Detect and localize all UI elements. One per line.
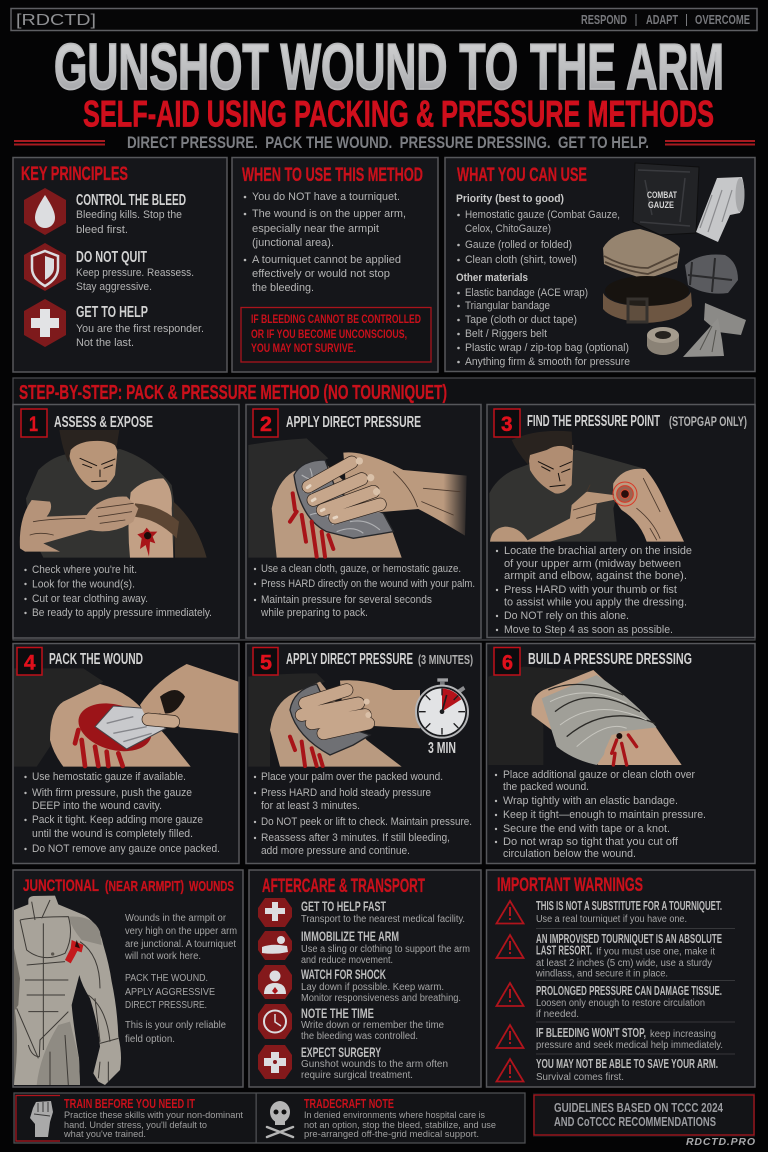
aftercare: watch for shock [301, 966, 461, 1004]
principle: control the bleed [76, 192, 186, 236]
principle: do not quit: Keep pressure. Reassess. [76, 267, 194, 279]
heading: junctional: (NEAR ARMPIT) [105, 879, 184, 895]
principle: do not quit: Stay aggressive. [76, 281, 152, 293]
tagline: DIRECT PRESSURE. PACK THE WOUND. PRESSURE DRESSING. GET TO HELP. [127, 133, 649, 152]
panel: when to use this method [232, 158, 438, 372]
callout: survival warning: IF BLEEDING CANNOT BE CONTROLLED [251, 312, 421, 326]
conditions list: The wound is on the upper arm, [252, 208, 406, 220]
panel: step-by-step section [13, 378, 755, 640]
icon: combat gauze packet: GAUZE [648, 200, 674, 211]
junctional text: DIRECT PRESSURE. [125, 1000, 207, 1011]
aftercare: expect surgery: Gunshot wounds to the arm often [301, 1059, 448, 1070]
icon: folded cloth [603, 229, 680, 279]
other materials list: Tape (cloth or duct tape) [465, 314, 577, 326]
illustration: sustained pressure [248, 673, 477, 767]
step 2 instructions: Use a clean cloth, gauze, or hemostatic gauze. [261, 563, 461, 575]
step 2 instructions: while preparing to pack. [260, 607, 368, 619]
illustration: pack the wound [14, 664, 238, 767]
illustration: pressure dressing [488, 667, 682, 765]
note: tradecraft: not an option, stop the bleed, stabilize, and use [304, 1120, 496, 1131]
icon: skull and crossbones [267, 1101, 293, 1137]
aftercare: note the time: the bleeding was controlled. [301, 1031, 418, 1042]
conditions list: especially near the armpit [252, 223, 379, 235]
aftercare: immobilize the arm: and reduce movement. [301, 955, 393, 966]
icon: clock [258, 1004, 292, 1039]
warning 2: LAST RESORT. [536, 944, 592, 958]
number badge 4 [17, 648, 42, 675]
aftercare: expect surgery: require surgical treatment. [301, 1070, 413, 1081]
step 6 instructions: circulation below the wound. [503, 848, 636, 860]
aftercare: get to help fast: GET TO HELP FAST [301, 898, 386, 914]
icon: elastic bandage [685, 254, 738, 294]
icon: stopwatch 3 minutes [416, 678, 468, 738]
aftercare: immobilize the arm: IMMOBILIZE THE ARM [301, 928, 399, 944]
step 3 instructions: armpit and elbow, against the bone). [504, 570, 687, 582]
number badge 5: 5 [260, 650, 272, 674]
step 5 instructions: Reassess after 3 minutes. If still bleeding, [261, 832, 450, 844]
step title 2: APPLY DIRECT PRESSURE [286, 414, 421, 431]
panel: important warnings [486, 870, 755, 1087]
motto: ADAPT [646, 12, 678, 27]
aftercare: watch for shock: Monitor responsiveness and breathing. [301, 993, 461, 1004]
panel: aftercare and transport [249, 870, 481, 1087]
priority list: Gauze (rolled or folded) [465, 239, 572, 251]
principle: get to help [76, 304, 204, 349]
warning 4: IF BLEEDING WON'T STOP, [536, 1026, 646, 1040]
icon: watch for shock [258, 965, 292, 999]
priority list [456, 193, 620, 266]
warning 2: windlass, and secure it in place. [535, 968, 668, 980]
principle: control the bleed: bleed first. [76, 224, 128, 236]
number badge 3 [494, 409, 520, 437]
step 5 instructions: for at least 3 minutes. [261, 800, 360, 812]
junctional text: Wounds in the armpit or [125, 913, 227, 924]
step 3 instructions: of your upper arm (midway between [504, 558, 681, 570]
warning 3: if needed. [536, 1009, 579, 1020]
step 2 instructions [254, 563, 475, 619]
aftercare: get to help fast: Transport to the nearest medical facility. [301, 914, 465, 925]
aftercare: note the time: NOTE THE TIME [301, 1005, 374, 1021]
step 6 instructions: Secure the end with tape or a knot. [503, 823, 670, 835]
icon: gauze roll [696, 177, 744, 242]
icon: immobilize [258, 931, 292, 960]
panel: key principles [13, 158, 227, 372]
step 3 instructions: to assist while you apply the dressing. [504, 596, 687, 608]
icon: combat gauze packet [633, 163, 699, 235]
step 4 instructions: Do NOT remove any gauze once packed. [32, 843, 220, 855]
step 6 instructions: Keep it tight—enough to maintain pressure. [503, 809, 706, 821]
step 5 instructions: Do NOT peek or lift to check. Maintain pressure. [261, 816, 472, 828]
step 6 instructions: the packed wound. [503, 781, 589, 793]
warning 2: at least 2 inches (5 cm) wide, use a sturdy [536, 958, 712, 969]
step title 1: ASSESS & EXPOSE [54, 414, 153, 431]
heading: junctional [23, 876, 234, 895]
junctional text: will not work here. [124, 951, 201, 962]
conditions list: the bleeding. [252, 282, 314, 294]
step title 3: FIND THE PRESSURE POINT [527, 413, 660, 430]
note: tradecraft: pre-arranged off-the-grid medical support. [304, 1129, 479, 1140]
warning 3: Loosen only enough to restore circulation [536, 998, 705, 1009]
warning 5 [496, 1057, 718, 1083]
card: step 1 [13, 404, 239, 638]
step 6 instructions: Place additional gauze or clean cloth over [503, 769, 695, 781]
icon: combat gauze packet: COMBAT [647, 190, 677, 201]
warning 1 [496, 899, 722, 925]
warning 3 [496, 983, 722, 1020]
step 3 instructions [496, 545, 692, 636]
conditions list: effectively or would not stop [252, 268, 390, 280]
step 4 instructions: With firm pressure, push the gauze [32, 787, 192, 799]
icon: surgery cross [258, 1045, 292, 1079]
note: train before you need it: hand. Under stress, you'll default to [64, 1120, 207, 1131]
step 3 instructions: Move to Step 4 as soon as possible. [504, 624, 673, 636]
other materials list: Triangular bandage [465, 300, 550, 312]
priority list: Clean cloth (shirt, towel) [465, 254, 577, 266]
other materials list [456, 272, 630, 368]
junctional text: are junctional. A tourniquet [125, 939, 236, 950]
logo: [RDCTD] [16, 12, 96, 29]
other materials list: Plastic wrap / zip-top bag (optional) [465, 342, 629, 354]
step title 5: (3 MINUTES) [418, 653, 473, 667]
note: tradecraft: In denied environments where hospital care is [304, 1110, 485, 1121]
warning 2: If you must use one, make it [596, 946, 715, 958]
other materials list: Other materials [456, 272, 528, 284]
warning 1: Use a real tourniquet if you have one. [536, 914, 687, 925]
icon: tape roll [647, 327, 679, 355]
card: step 4 [13, 644, 239, 864]
number badge 6 [494, 648, 520, 675]
callout: survival warning: OR IF YOU BECOME UNCONSCIOUS, [251, 327, 407, 341]
principle: get to help: Not the last. [76, 337, 134, 349]
step 3 instructions: Locate the brachial artery on the inside [504, 545, 692, 557]
aftercare: immobilize the arm [301, 928, 470, 966]
step 6 instructions [495, 769, 706, 860]
other materials list: Anything firm & smooth for pressure [465, 356, 630, 368]
aftercare: expect surgery: EXPECT SURGERY [301, 1044, 381, 1060]
step 3 instructions: Do NOT rely on this alone. [504, 610, 629, 622]
illustration: anatomical torso [14, 896, 121, 1085]
junctional text: very high on the upper arm [125, 926, 237, 937]
note: train before you need it: Practice these skills with your non-dominant [64, 1110, 243, 1121]
header bar [11, 8, 757, 30]
warning 4: keep increasing [650, 1029, 716, 1040]
warning 5: Survival comes first. [536, 1072, 624, 1083]
card: step 5 [246, 644, 481, 864]
principle: do not quit [76, 249, 194, 293]
warning 4 [496, 1025, 723, 1051]
step 1 instructions [24, 564, 212, 619]
step 5 instructions: add more pressure and continue. [261, 845, 410, 857]
note: train before you need it: what you've trained. [63, 1129, 146, 1140]
aftercare: note the time: Write down or remember the time [301, 1020, 444, 1031]
conditions list: A tourniquet cannot be applied [252, 254, 401, 266]
heading: what you can use: WHAT YOU CAN USE [457, 164, 587, 186]
principle: do not quit: DO NOT QUIT [76, 249, 147, 266]
step 4 instructions: DEEP into the wound cavity. [32, 800, 162, 812]
heading: junctional: WOUNDS [189, 878, 234, 895]
panel: junctional wounds [13, 870, 243, 1087]
number badge 4: 4 [24, 650, 36, 674]
aftercare: get to help fast [301, 898, 465, 925]
website: RDCTD.PRO [686, 1136, 755, 1148]
illustration: pressure point [489, 431, 684, 542]
conditions list: (junctional area). [252, 237, 334, 249]
conditions list: You do NOT have a tourniquet. [252, 191, 400, 203]
warning 2 [496, 932, 722, 980]
note: train before you need it [63, 1096, 243, 1140]
callout: guidelines [533, 1093, 755, 1137]
other materials list: Belt / Riggers belt [465, 328, 547, 340]
timer label: 3 MIN [428, 740, 456, 757]
panel: training and tradecraft footer [14, 1093, 525, 1143]
step 4 instructions: until the wound is completely filled. [32, 828, 193, 840]
number badge 6: 6 [502, 650, 513, 674]
icon: shield [24, 243, 66, 291]
icon: triangular bandage [683, 303, 746, 357]
heading: junctional: JUNCTIONAL [23, 876, 99, 895]
step title 4: PACK THE WOUND [49, 651, 143, 668]
icon: raised fist [30, 1101, 53, 1137]
icon: medical transport [258, 898, 292, 927]
junctional text: This is your only reliable [125, 1020, 226, 1031]
number badge 5 [253, 648, 278, 675]
motto: RESPOND [581, 12, 627, 27]
heading: key principles: KEY PRINCIPLES [21, 163, 128, 185]
junctional text: APPLY AGGRESSIVE [125, 987, 215, 998]
aftercare: immobilize the arm: Use a sling or clothing to support the arm [301, 944, 470, 955]
number badge 2: 2 [260, 412, 272, 436]
junctional text: PACK THE WOUND. [125, 973, 208, 984]
step 3 instructions: Press HARD with your thumb or fist [504, 584, 677, 596]
illustration: direct pressure [248, 438, 470, 558]
motto [581, 12, 750, 27]
number badge 2 [253, 409, 278, 437]
heading: warnings: IMPORTANT WARNINGS [497, 874, 643, 896]
step 1 instructions: Be ready to apply pressure immediately. [32, 607, 212, 619]
aftercare: note the time [301, 1005, 444, 1042]
number badge 1: 1 [29, 412, 38, 436]
priority list: Celox, ChitoGauze) [465, 223, 551, 235]
illustration: assess and expose [20, 430, 207, 558]
step title 5: APPLY DIRECT PRESSURE [286, 651, 413, 668]
principle: control the bleed: Bleeding kills. Stop the [76, 209, 182, 221]
step 4 instructions [24, 771, 220, 855]
number badge 1 [21, 409, 47, 437]
card: step 2 [246, 404, 481, 638]
junctional text [124, 913, 237, 1045]
step 5 instructions [254, 771, 472, 857]
aftercare: expect surgery [301, 1044, 448, 1081]
step 6 instructions: Do not wrap so tight that you cut off [503, 836, 678, 848]
step 1 instructions: Cut or tear clothing away. [32, 593, 148, 605]
step 1 instructions: Look for the wound(s). [32, 578, 135, 590]
icon: belt [603, 276, 692, 323]
principle: get to help: GET TO HELP [76, 304, 148, 321]
heading: when to use: WHEN TO USE THIS METHOD [242, 164, 423, 186]
note: tradecraft: TRADECRAFT NOTE [304, 1096, 394, 1111]
callout: survival warning [241, 308, 431, 362]
step title 6: BUILD A PRESSURE DRESSING [528, 651, 692, 668]
step 1 instructions: Check where you're hit. [32, 564, 137, 576]
principle: get to help: You are the first responder. [76, 323, 204, 335]
junctional text: field option. [125, 1034, 175, 1045]
callout: survival warning: YOU MAY NOT SURVIVE. [251, 341, 356, 355]
aftercare: watch for shock: WATCH FOR SHOCK [301, 966, 386, 982]
step 2 instructions: Maintain pressure for several seconds [261, 594, 432, 606]
aftercare: watch for shock: Lay down if possible. Keep warm. [301, 982, 444, 993]
icon: blood drop [24, 188, 66, 235]
step 5 instructions: Place your palm over the packed wound. [261, 771, 443, 783]
step 6 instructions: Wrap tightly with an elastic bandage. [503, 795, 678, 807]
card: step 3 [487, 404, 755, 638]
number badge 3: 3 [501, 412, 513, 436]
other materials list: Elastic bandage (ACE wrap) [465, 287, 588, 299]
icon: medical cross [24, 299, 66, 347]
note: tradecraft [304, 1096, 496, 1140]
step 5 instructions: Press HARD and hold steady pressure [261, 787, 431, 799]
heading: step-by-step: STEP-BY-STEP: PACK & PRESSURE METHOD (NO TOURNIQUET) [19, 382, 447, 404]
note: train before you need it: TRAIN BEFORE YOU NEED IT [64, 1096, 195, 1111]
priority list: Priority (best to good) [456, 193, 564, 205]
step 4 instructions: Pack it tight. Keep adding more gauze [32, 814, 203, 826]
conditions list [244, 191, 406, 294]
heading: aftercare: AFTERCARE & TRANSPORT [262, 875, 425, 897]
priority list: Hemostatic gauze (Combat Gauze, [465, 209, 620, 221]
warning 4: pressure and seek medical help immediately. [536, 1040, 723, 1051]
panel: what you can use [445, 158, 755, 372]
card: step 6 [486, 644, 755, 864]
step 2 instructions: Press HARD directly on the wound with your palm. [261, 578, 475, 590]
principle: control the bleed: CONTROL THE BLEED [76, 192, 186, 209]
step 4 instructions: Use hemostatic gauze if available. [32, 771, 186, 783]
